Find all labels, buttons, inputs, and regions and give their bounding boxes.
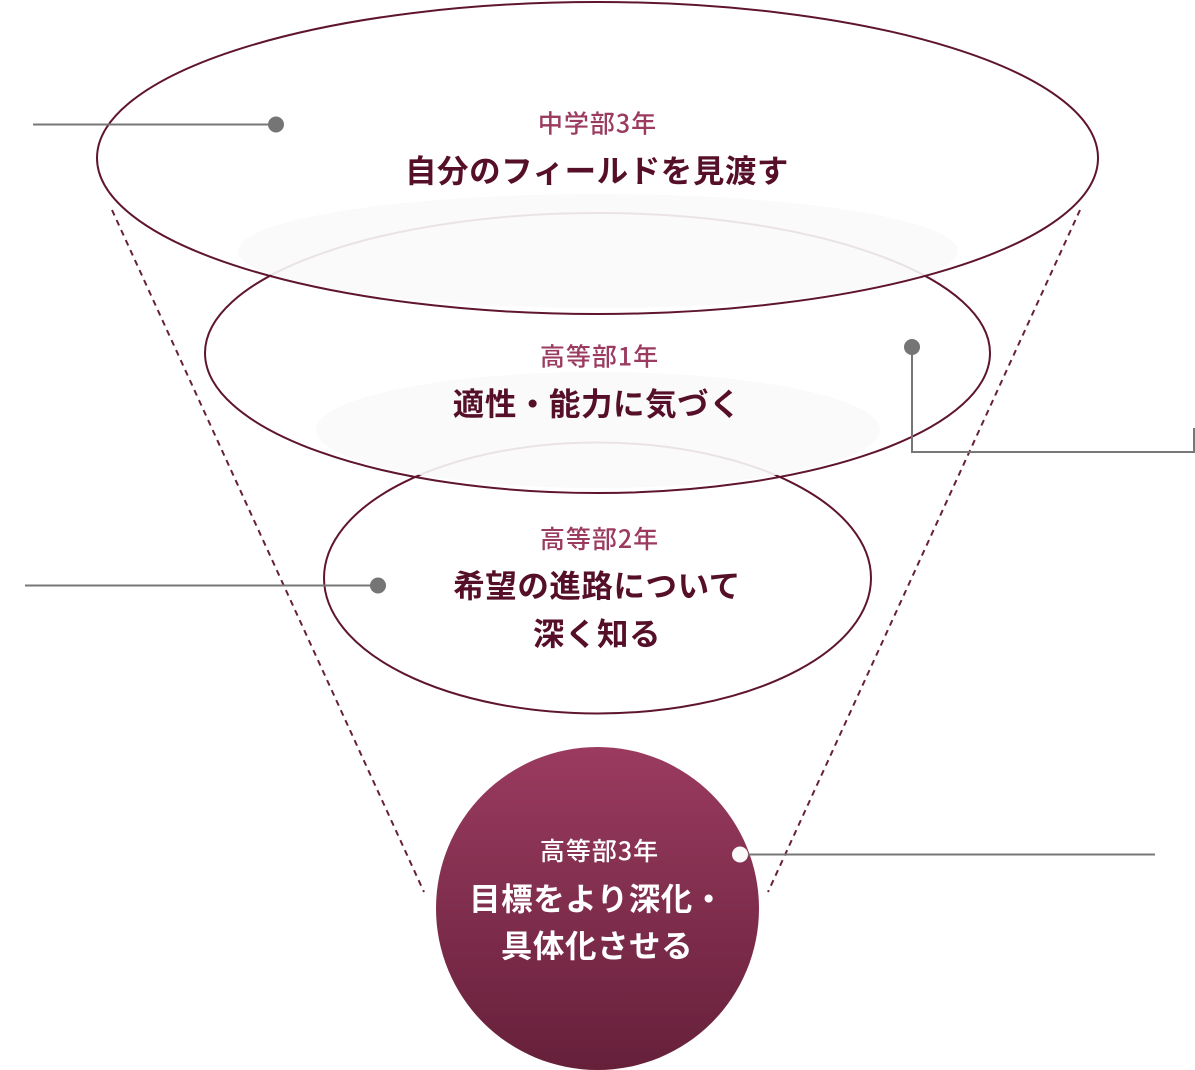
circle: 高等部3年	[436, 747, 759, 1070]
ellipse: 高等部1年	[205, 213, 990, 493]
leader: bottom right	[732, 846, 1155, 862]
leader: top left	[33, 116, 284, 132]
text: 高等部2年	[453, 520, 741, 655]
leader: right elbow	[904, 339, 1194, 452]
leader: middle left	[25, 578, 386, 594]
ellipse: 中学部3年	[97, 2, 1098, 314]
text: 中学部3年: 自分のフィールドを見渡す	[405, 146, 789, 192]
text: 高等部2年: 希望の進路について	[453, 561, 741, 607]
text: 高等部3年	[469, 832, 725, 967]
shadow under top ellipse	[238, 194, 958, 308]
funnel right dashed edge	[768, 210, 1080, 892]
text: 高等部2年: 深く知る	[533, 609, 661, 655]
text: 高等部3年: 目標をより深化・	[469, 874, 725, 920]
text: 高等部3年: 具体化させる	[501, 921, 693, 967]
text: 高等部3年: 高等部3年	[540, 832, 659, 868]
ellipse: 高等部2年	[324, 442, 871, 714]
text: 高等部1年	[453, 338, 741, 425]
shadow under second ellipse	[316, 372, 880, 488]
text: 中学部3年	[405, 104, 789, 192]
funnel left dashed edge	[112, 210, 424, 892]
text: 高等部1年: 適性・能力に気づく	[453, 379, 741, 425]
text: 高等部1年: 高等部1年	[540, 338, 659, 374]
text: 高等部2年: 高等部2年	[540, 520, 659, 556]
text: 中学部3年: 中学部3年	[538, 104, 657, 140]
